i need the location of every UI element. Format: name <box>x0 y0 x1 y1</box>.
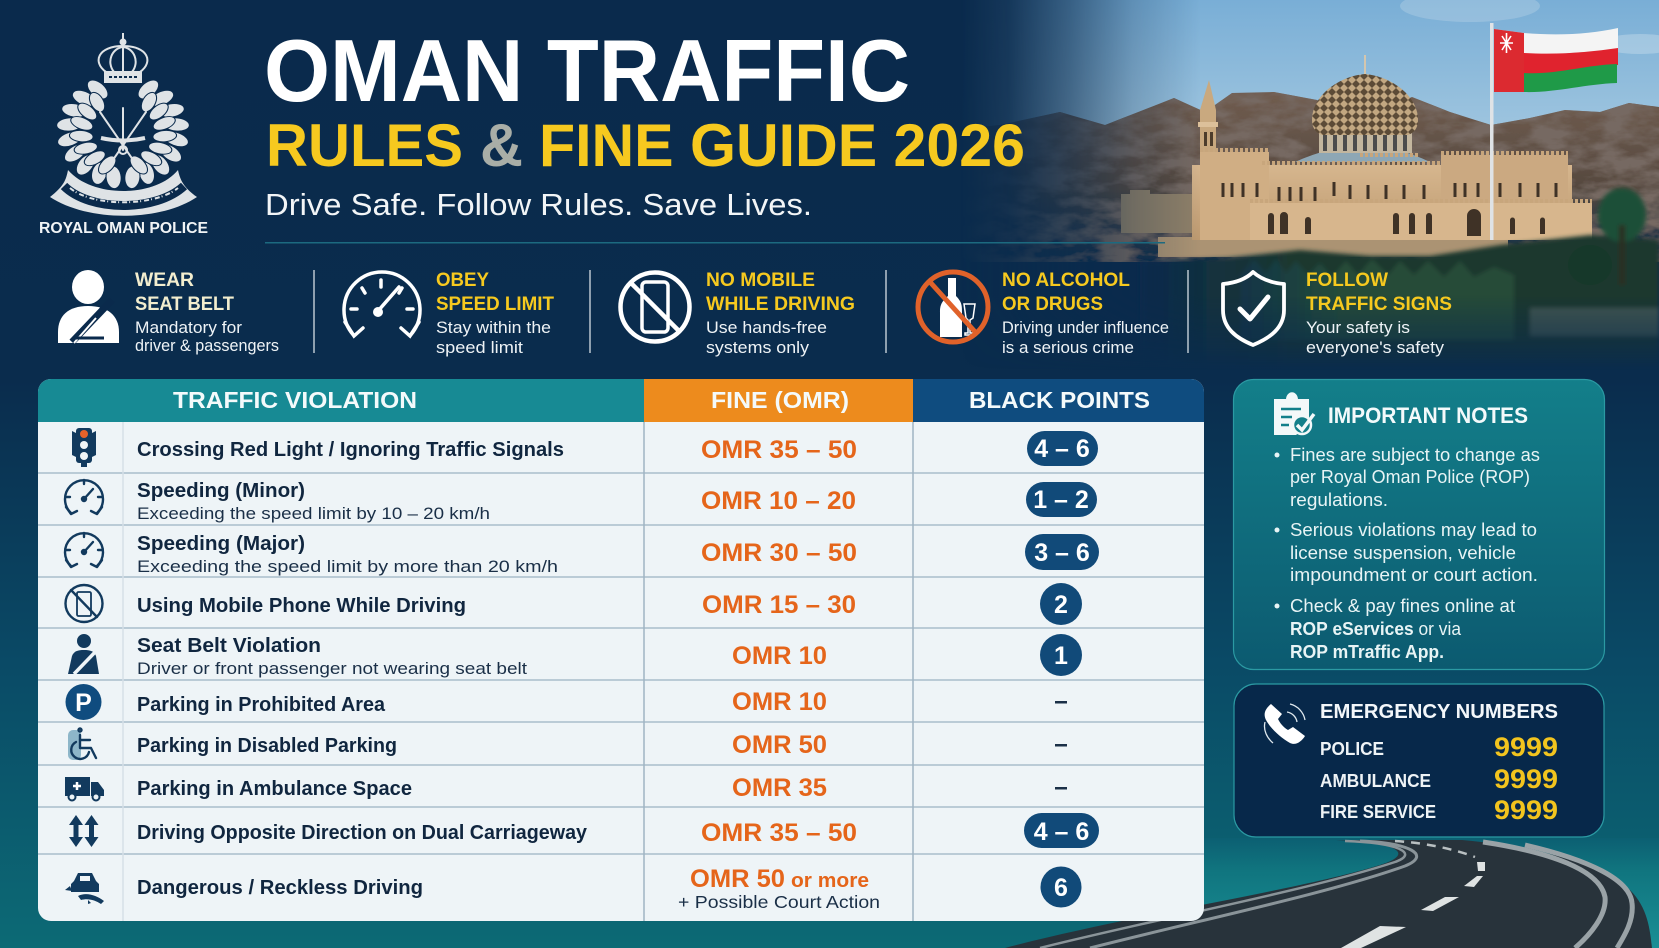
photo: palace, mountains and Omani flag <box>986 0 1659 352</box>
icon: no phone <box>66 585 102 622</box>
rule: follow traffic signs: FOLLOW <box>1306 269 1389 291</box>
icon: gauge <box>65 533 103 567</box>
row: seat belt: OMR 10 <box>732 642 827 670</box>
note list <box>1274 444 1540 662</box>
rule: wear seat belt: driver & passengers <box>135 337 279 355</box>
panel: emergency numbers: AMBULANCE <box>1320 771 1431 791</box>
rule: obey speed limit: OBEY <box>436 269 489 291</box>
rule: wear seat belt: WEAR <box>135 269 194 291</box>
rule: no alcohol or drugs: OR DRUGS <box>1002 293 1103 315</box>
violations table <box>38 379 1204 921</box>
rule: obey speed limit: SPEED LIMIT <box>436 293 554 315</box>
row: reckless driving: Dangerous / Reckless Driving <box>137 877 423 899</box>
icon: parking: P <box>75 689 92 717</box>
row: red light <box>72 428 1098 467</box>
rule: follow traffic signs <box>1223 269 1452 357</box>
badge: 1-2 points <box>1026 482 1097 517</box>
icon: clipboard with check <box>1274 392 1314 435</box>
rule: obey speed limit <box>344 269 554 357</box>
badge: 3-6 points <box>1025 534 1099 570</box>
table header: BLACK POINTS <box>969 387 1150 413</box>
fine with note: or more <box>791 870 869 892</box>
row: red light: OMR 35 – 50 <box>701 436 857 464</box>
note list: Serious violations may lead to <box>1290 519 1537 540</box>
note list: ROP eServices or via <box>1290 618 1462 639</box>
fine with note: OMR 50 <box>690 865 785 893</box>
banner <box>50 170 197 216</box>
note list: impoundment or court action. <box>1290 564 1538 585</box>
badge: 1-2 points: 1 – 2 <box>1033 486 1089 514</box>
rule: no mobile while driving <box>620 269 855 357</box>
table header: FINE (OMR) <box>711 387 849 413</box>
rule: no alcohol or drugs <box>918 269 1169 357</box>
rule: no mobile while driving: Use hands-free <box>706 319 827 337</box>
badge: 4-6 points: 4 – 6 <box>1034 818 1089 846</box>
icon: ambulance <box>65 777 104 800</box>
badge: 4-6 points <box>1024 813 1099 848</box>
title: RULES <box>266 112 463 179</box>
badge: 2 points <box>1040 583 1082 625</box>
fine with note <box>678 865 880 912</box>
badge: 6 points: 6 <box>1054 874 1068 902</box>
row: speeding minor: OMR 10 – 20 <box>701 487 856 515</box>
rule: no alcohol or drugs: NO ALCOHOL <box>1002 269 1130 291</box>
road background <box>1005 838 1659 948</box>
icon: person with seat belt <box>58 270 119 343</box>
row: disabled parking <box>68 728 1067 760</box>
row: prohibited parking: Parking in Prohibited Area <box>137 694 386 716</box>
rule: wear seat belt <box>58 269 279 355</box>
rule: no alcohol or drugs: is a serious crime <box>1002 339 1134 357</box>
row: disabled parking: Parking in Disabled Parking <box>137 735 397 757</box>
badge: 3-6 points: 3 – 6 <box>1034 539 1090 567</box>
row: prohibited parking <box>66 684 1067 720</box>
row: ambulance space: OMR 35 <box>732 774 827 802</box>
row: ambulance space <box>65 774 1067 802</box>
panel: important notes: IMPORTANT NOTES <box>1328 403 1528 428</box>
minaret <box>1198 80 1218 152</box>
rule: follow traffic signs: Your safety is <box>1306 319 1410 337</box>
panel: emergency numbers <box>1234 684 1604 837</box>
khanjar and crossed swords <box>100 108 146 170</box>
row: speeding major <box>65 533 1099 576</box>
rule: follow traffic signs: TRAFFIC SIGNS <box>1306 293 1452 315</box>
title: OMAN TRAFFIC <box>264 21 910 120</box>
note list: license suspension, vehicle <box>1290 542 1516 563</box>
icon: seat belt <box>68 634 99 674</box>
panel: emergency numbers: 9999 <box>1494 764 1558 794</box>
row: seat belt <box>68 634 1082 678</box>
panel: emergency numbers: EMERGENCY NUMBERS <box>1320 700 1558 723</box>
rule: follow traffic signs: everyone's safety <box>1306 339 1445 357</box>
table header <box>173 387 1150 413</box>
icon: traffic light <box>72 428 96 467</box>
subtitle: Drive Safe. Follow Rules. Save Lives. <box>265 187 812 222</box>
badge: 6 points <box>1040 866 1082 908</box>
table header: TRAFFIC VIOLATION <box>173 387 417 413</box>
icon: phone <box>1264 704 1305 744</box>
badge: 1 point: 1 <box>1054 642 1068 670</box>
badge: 2 points: 2 <box>1054 591 1068 619</box>
row: speeding major: Speeding (Major) <box>137 533 305 555</box>
row: speeding minor: Exceeding the speed limit by 10 – 20 km/h <box>137 504 490 523</box>
flag and pole <box>1490 23 1618 240</box>
row: seat belt: Seat Belt Violation <box>137 635 321 657</box>
rule: no mobile while driving: systems only <box>706 339 810 357</box>
row: seat belt: Driver or front passenger not wearing seat belt <box>137 659 527 678</box>
wreath <box>55 77 191 189</box>
badge: 4-6 points: 4 – 6 <box>1034 435 1090 463</box>
badge: 4-6 points <box>1027 431 1098 466</box>
row: ambulance space: Parking in Ambulance Space <box>137 778 412 800</box>
note list: per Royal Oman Police (ROP) <box>1290 466 1530 487</box>
row: speeding major: Exceeding the speed limit by more than 20 km/h <box>137 557 558 576</box>
row: disabled parking: OMR 50 <box>732 731 827 759</box>
rule: no alcohol or drugs: Driving under influence <box>1002 319 1169 337</box>
fine with note: + Possible Court Action <box>678 892 880 912</box>
icon: wheelchair <box>68 728 96 760</box>
icon: gauge <box>65 480 103 514</box>
panel: emergency numbers: FIRE SERVICE <box>1320 802 1436 822</box>
icon: parking <box>66 684 102 720</box>
row: speeding minor <box>65 480 1097 523</box>
icon: opposite arrows <box>69 815 98 847</box>
panel: emergency numbers: 9999 <box>1494 732 1558 762</box>
rule: wear seat belt: Mandatory for <box>135 319 243 337</box>
row: wrong way: Driving Opposite Direction on Dual Carriageway <box>137 822 588 844</box>
rule: no mobile while driving: WHILE DRIVING <box>706 293 855 315</box>
note list: Fines are subject to change as <box>1290 444 1540 465</box>
title: FINE GUIDE 2026 <box>539 112 1025 179</box>
row: wrong way <box>69 813 1099 848</box>
title <box>264 21 1025 179</box>
dome <box>1295 55 1430 162</box>
panel: important notes <box>1234 380 1604 670</box>
panel: emergency numbers: POLICE <box>1320 739 1384 759</box>
title: & <box>480 112 523 179</box>
note list: Check & pay fines online at <box>1290 595 1515 616</box>
badge: 1 point <box>1040 634 1082 676</box>
row: mobile phone: OMR 15 – 30 <box>702 591 856 619</box>
panel: emergency numbers: 9999 <box>1494 795 1558 825</box>
row: reckless driving <box>65 865 1082 912</box>
row: speeding minor: Speeding (Minor) <box>137 480 305 502</box>
icon: no alcohol <box>918 272 988 342</box>
icon: no phone <box>620 272 690 342</box>
emblem: Royal Oman Police <box>39 33 208 237</box>
row: mobile phone: Using Mobile Phone While Driving <box>137 595 466 617</box>
emblem caption: ROYAL OMAN POLICE <box>39 220 208 237</box>
rule: obey speed limit: Stay within the <box>436 319 551 337</box>
rule: obey speed limit: speed limit <box>436 339 523 357</box>
note list: ROP mTraffic App. <box>1290 641 1444 662</box>
row: speeding major: OMR 30 – 50 <box>701 539 857 567</box>
mountains <box>982 92 1659 262</box>
icon: shield with check <box>1223 272 1284 345</box>
row: mobile phone <box>66 583 1082 625</box>
icon: skidding car <box>65 873 104 904</box>
row: red light: Crossing Red Light / Ignoring Traffic Signals <box>137 439 564 461</box>
note list: regulations. <box>1290 489 1388 510</box>
row: wrong way: OMR 35 – 50 <box>701 819 857 847</box>
icon: speedometer <box>344 272 420 336</box>
palace <box>1121 55 1592 257</box>
crown <box>99 33 147 82</box>
rule: no mobile while driving: NO MOBILE <box>706 269 815 291</box>
rule: wear seat belt: SEAT BELT <box>135 293 234 315</box>
palm trees and greenery <box>1140 185 1659 351</box>
row: prohibited parking: OMR 10 <box>732 688 827 716</box>
